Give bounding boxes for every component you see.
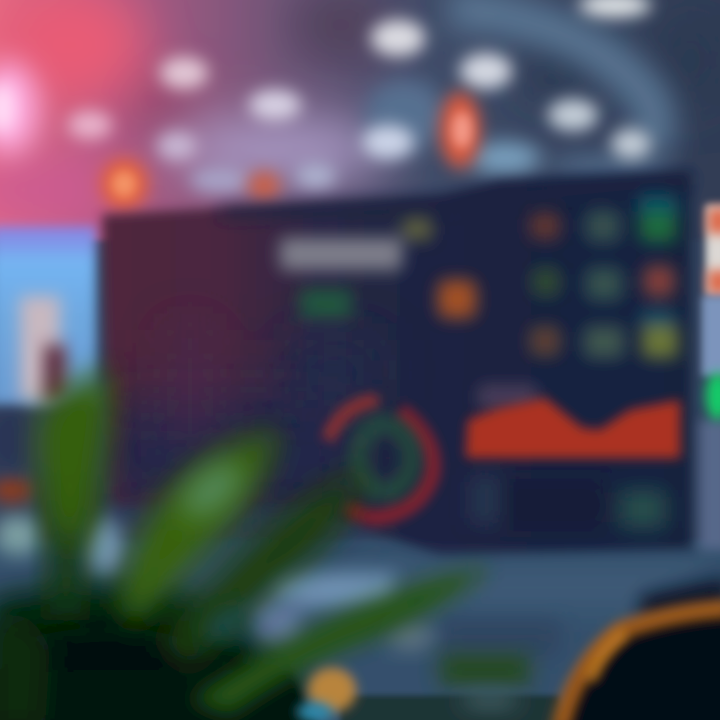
green status pill: [300, 290, 352, 318]
small orange object at bottom: [297, 668, 356, 720]
dark base at lower edge: [0, 670, 320, 720]
orange center tile: [438, 280, 476, 318]
leaf: left dark: [0, 614, 50, 720]
bottom chart tiles: [470, 475, 666, 530]
leaf: right upper: [160, 470, 362, 670]
screen background: [102, 172, 692, 556]
donut chart: [328, 400, 433, 518]
ceiling beam arc: [450, 8, 655, 150]
icon grid: [530, 195, 678, 358]
screen dark top band: [220, 174, 690, 218]
dark base foliage: [0, 584, 320, 700]
teal shadow: [197, 600, 253, 650]
left panel tone patches: [170, 330, 380, 440]
leaf: stem shadow: [50, 480, 90, 620]
left blue sign: [0, 226, 96, 406]
leaf: tall center: [38, 372, 110, 540]
pink light glow: [0, 0, 720, 220]
panel: dashboard screen: [102, 172, 692, 556]
foreground monitor: orange rim: [556, 578, 720, 720]
area chart: red: [466, 385, 680, 458]
leaf: mid: [118, 430, 280, 625]
header text block blur: [280, 218, 432, 270]
leaf highlight: [173, 453, 251, 527]
lower screen navy fade: [110, 400, 350, 510]
lower room tones: [0, 410, 700, 720]
orange lamps: [100, 92, 480, 210]
glow core at far left: [0, 62, 38, 154]
plant: [0, 372, 490, 720]
ceiling lights: [68, 0, 651, 192]
blue ceiling reflection: [365, 79, 670, 177]
leaf: long right: [190, 568, 490, 715]
right edge glows: [700, 205, 720, 550]
